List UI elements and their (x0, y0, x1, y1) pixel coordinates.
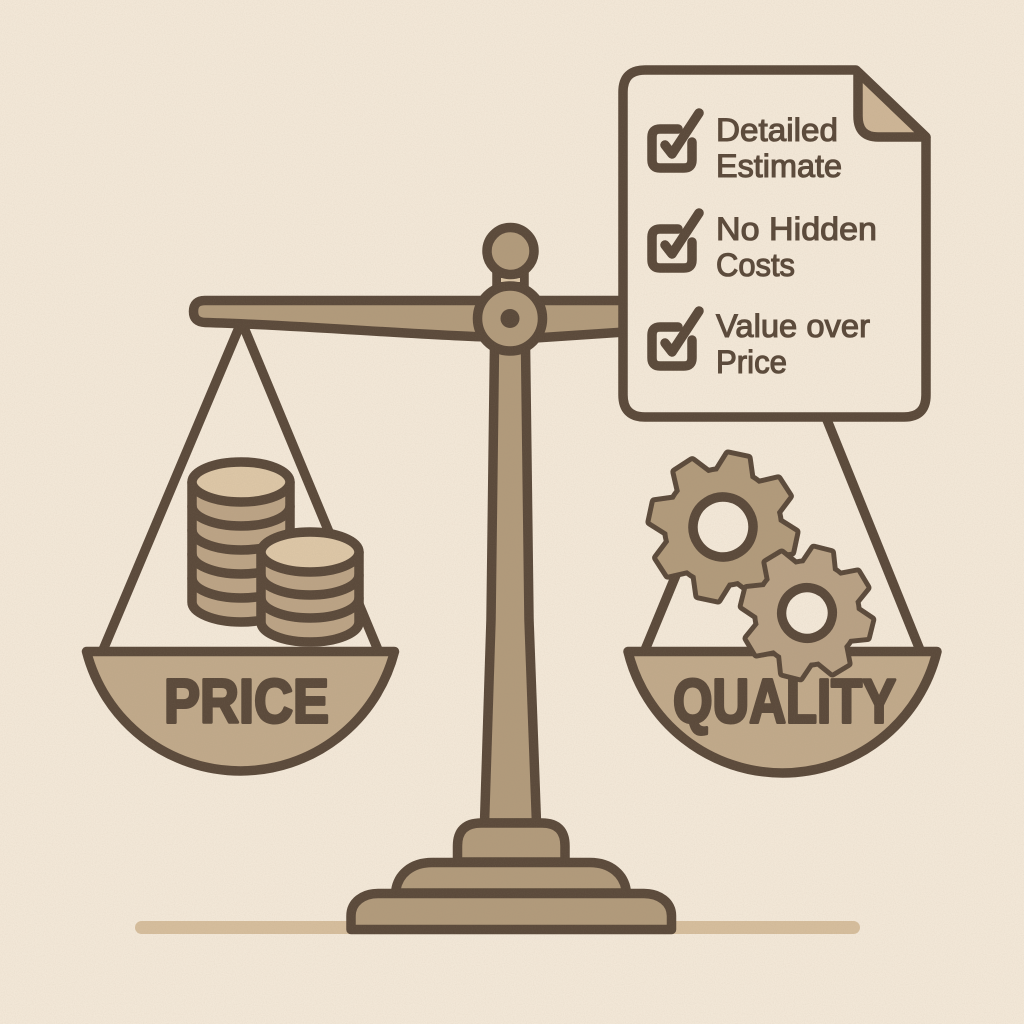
left pan assembly: price (86, 330, 394, 771)
icon: short coin stack (261, 532, 359, 642)
checklist item: detailed estimate: Estimate (716, 148, 842, 184)
label: price: PRICE (164, 668, 329, 736)
checklist item: no hidden costs: Costs (716, 247, 795, 283)
left pan bowl (86, 652, 394, 771)
checklist item: detailed estimate (652, 112, 842, 184)
scale column and base (351, 345, 672, 930)
panel: checklist document (623, 70, 926, 417)
checklist item: value over price: Price (716, 344, 787, 380)
column (484, 345, 536, 823)
document sheet (623, 70, 926, 417)
right pan bowl (628, 652, 937, 773)
ground shadow (135, 921, 860, 934)
checklist item: value over price (652, 308, 870, 380)
right pan strings (645, 415, 920, 650)
beam right arm (535, 300, 625, 338)
icon: tall coin stack (192, 462, 290, 622)
pivot hub (478, 286, 542, 351)
icon: large gear (638, 442, 808, 612)
label: quality: QUALITY (673, 668, 896, 736)
icon: small gear (729, 535, 885, 691)
checklist item: value over price: Value over (716, 308, 870, 344)
base top step (458, 823, 565, 862)
beam left arm (194, 300, 485, 337)
checklist item: detailed estimate: Detailed (716, 112, 838, 148)
checklist item: no hidden costs: No Hidden (716, 211, 877, 247)
checklist item: no hidden costs (652, 211, 877, 283)
base middle step (396, 862, 626, 893)
right pan assembly: quality (628, 415, 937, 773)
folded corner (858, 72, 926, 137)
balance beam (194, 300, 625, 338)
left pan strings (103, 330, 378, 650)
finial (487, 228, 534, 294)
base bottom step (351, 894, 672, 930)
